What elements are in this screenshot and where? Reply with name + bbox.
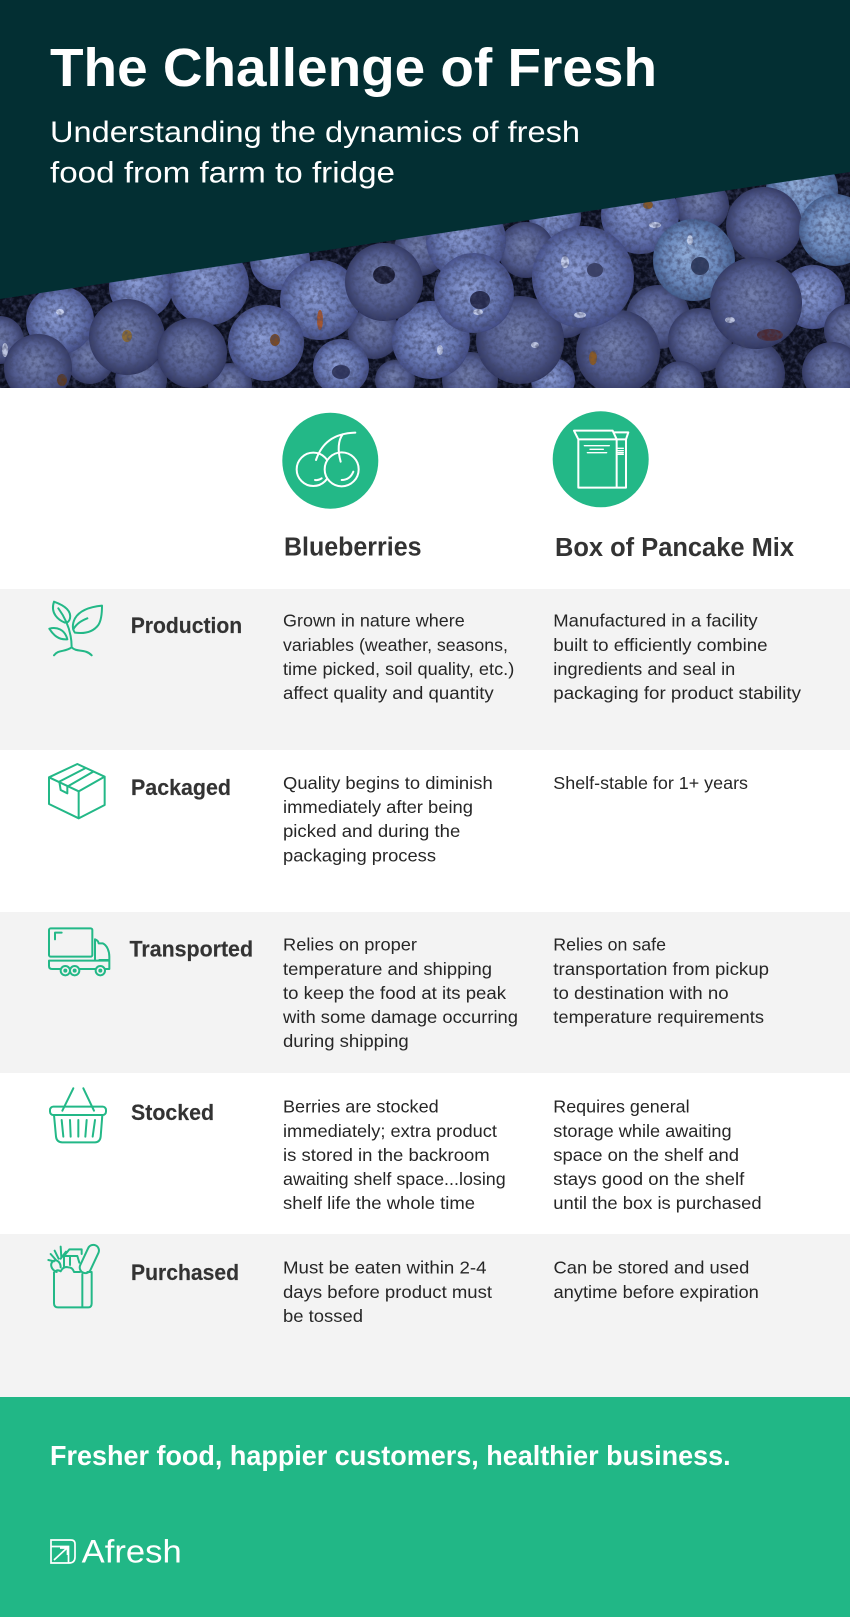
row: purchased (48, 1243, 759, 1326)
text: blueberries packaged: packaging process (283, 846, 436, 866)
label: Packaged: Packaged (131, 775, 231, 800)
subtitle: food from farm to fridge (50, 156, 395, 190)
text: pancake production (553, 611, 801, 703)
icon: grocery bag (48, 1243, 101, 1307)
text: pancake transported (553, 935, 769, 1027)
row: production (49, 602, 801, 703)
text: blueberries transported: to keep the food at its peak (283, 983, 506, 1003)
text: pancake production: ingredients and seal in (553, 659, 735, 679)
text: pancake stocked (553, 1097, 762, 1213)
icon: basket (50, 1088, 106, 1142)
icon: plant (49, 602, 102, 655)
text: pancake transported: temperature requirements (553, 1007, 764, 1027)
text: pancake transported: to destination with no (553, 983, 729, 1003)
text: blueberries transported: Relies on proper (283, 935, 417, 955)
text: pancake production: built to efficiently combine (553, 635, 768, 655)
text: blueberries stocked: immediately; extra product (283, 1121, 497, 1141)
text: pancake stocked: storage while awaiting (553, 1121, 732, 1141)
text: blueberries purchased: Must be eaten within 2-4 (283, 1258, 487, 1278)
text: blueberries purchased: be tossed (283, 1306, 363, 1326)
title: The Challenge of Fresh (50, 38, 657, 98)
text: blueberries stocked (283, 1097, 506, 1213)
text: pancake production: Manufactured in a facility (553, 611, 758, 631)
column header: blueberries (282, 413, 422, 562)
text: pancake stocked: Requires general (553, 1097, 690, 1117)
text: blueberries purchased: days before product must (283, 1282, 492, 1302)
text: blueberries transported: during shipping (283, 1031, 409, 1051)
text: pancake stocked: space on the shelf and (553, 1145, 739, 1165)
tagline: Fresher food, happier customers, healthier business. (50, 1440, 731, 1471)
icon: truck (49, 928, 109, 975)
text: blueberries packaged: immediately after being (283, 797, 473, 817)
text: blueberries transported (282, 935, 518, 1051)
icon: cherries in green circle (282, 413, 378, 509)
icon: cardboard box (49, 764, 105, 818)
text: pancake production: packaging for product stability (553, 683, 801, 703)
text: blueberries packaged: picked and during the (283, 821, 460, 841)
text: pancake stocked: stays good on the shelf (553, 1169, 744, 1189)
text: blueberries purchased (283, 1258, 492, 1326)
text: pancake transported: Relies on safe (553, 935, 666, 955)
text: blueberries production: variables (weather, seasons, (283, 635, 508, 655)
heading: Box of Pancake Mix: Box of Pancake Mix (555, 534, 794, 562)
text: pancake purchased: Can be stored and used (554, 1258, 749, 1278)
text: blueberries packaged (283, 773, 493, 866)
text: blueberries production: affect quality and quantity (283, 683, 494, 703)
text: pancake packaged: Shelf-stable for 1+ years (553, 773, 748, 793)
text: pancake purchased: anytime before expiration (554, 1282, 759, 1302)
subtitle: Understanding the dynamics of fresh (50, 116, 580, 149)
text: pancake purchased (554, 1258, 759, 1302)
label: Stocked: Stocked (131, 1100, 214, 1125)
subtitle (50, 116, 580, 190)
text: blueberries transported: temperature and shipping (283, 959, 492, 979)
icon: box in green circle (553, 411, 649, 507)
text: pancake stocked: until the box is purchased (553, 1193, 762, 1213)
label: Production: Production (131, 613, 242, 638)
label: Purchased: Purchased (131, 1260, 239, 1285)
panel: footer (0, 1397, 850, 1617)
panel: rows background (0, 589, 850, 1397)
logo: Afresh: Afresh (82, 1534, 182, 1570)
heading: Blueberries: Blueberries (284, 534, 422, 562)
photo: blueberries (0, 172, 850, 388)
text: blueberries transported: with some damage occurring (282, 1007, 518, 1027)
text: blueberries production: time picked, soil quality, etc.) (283, 659, 514, 679)
text: blueberries stocked: awaiting shelf space...losing (283, 1169, 506, 1189)
text: blueberries stocked: Berries are stocked (283, 1097, 439, 1117)
text: blueberries production (283, 611, 514, 703)
text: blueberries stocked: shelf life the whole time (283, 1193, 475, 1213)
panel: header (0, 0, 850, 409)
background: dark teal diagonal (0, 0, 850, 299)
text: blueberries stocked: is stored in the backroom (283, 1145, 490, 1165)
text: blueberries production: Grown in nature where (283, 611, 465, 631)
label: Transported: Transported (130, 937, 253, 962)
row: transported (49, 928, 769, 1051)
text: blueberries packaged: Quality begins to diminish (283, 773, 493, 793)
row: stocked (50, 1088, 762, 1213)
row: packaged (49, 764, 748, 866)
column header: box of pancake mix (553, 411, 794, 562)
text: pancake transported: transportation from pickup (553, 959, 769, 979)
